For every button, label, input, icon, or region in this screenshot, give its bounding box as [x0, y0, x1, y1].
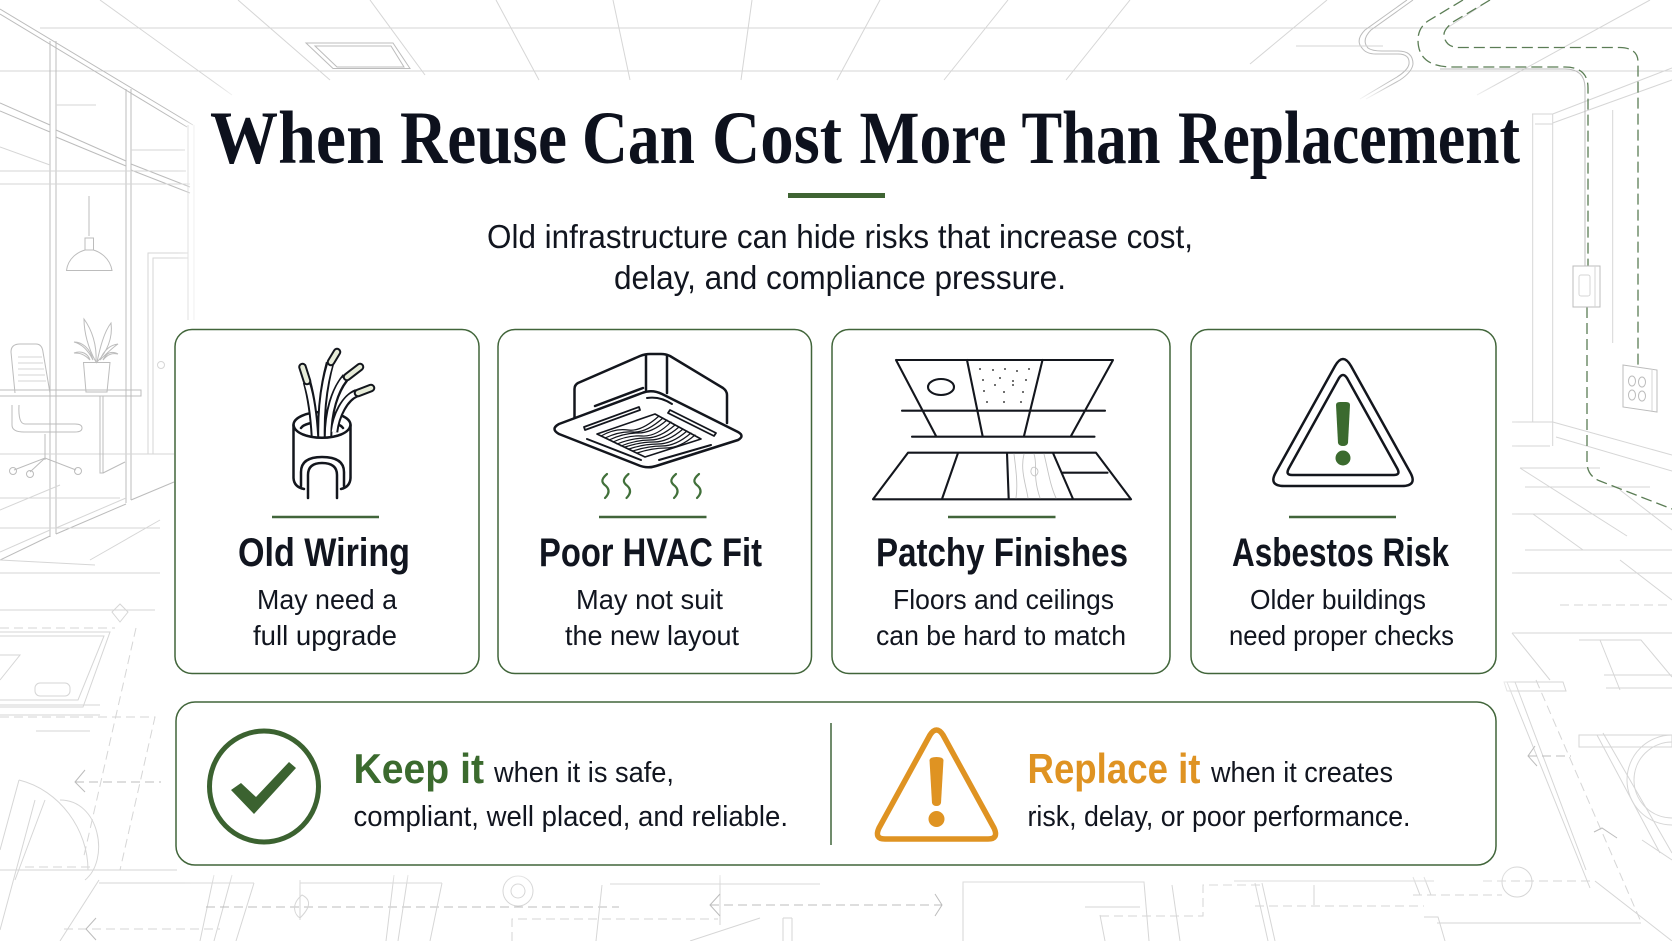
vertical divider: [830, 723, 832, 845]
ceiling grid: [0, 0, 1672, 95]
panel: old wiring: [175, 330, 479, 674]
plant: [74, 319, 118, 392]
icon: cassette air conditioner: [554, 354, 742, 498]
pendant lamp: [66, 196, 112, 270]
keep it text: Keep it: [354, 745, 484, 792]
title: Can: [582, 97, 695, 180]
description: the new layout: [565, 620, 739, 651]
description: [565, 584, 739, 651]
description: can be hard to match: [876, 620, 1126, 651]
replace it text: Replace it: [1028, 745, 1201, 792]
panel: patchy finishes: [832, 330, 1170, 674]
white centre fade: [192, 92, 1504, 874]
glass office wall: [0, 9, 194, 560]
chair: [10, 344, 82, 478]
heading: Asbestos Risk: [1232, 531, 1450, 575]
divider: [948, 516, 1056, 518]
conduit runs: [1296, 0, 1672, 509]
panel: keep or replace summary: [176, 702, 1496, 865]
keep it text: compliant, well placed, and reliable.: [354, 801, 788, 833]
floor plan left: [0, 560, 942, 941]
title: Reuse: [400, 97, 567, 180]
subtitle: delay, and compliance pressure.: [614, 259, 1066, 296]
wall switch: [1573, 266, 1600, 307]
title rule: [788, 193, 885, 198]
replace it text: when it creates: [1210, 757, 1393, 789]
description: [1229, 584, 1454, 651]
title: Replacement: [1178, 97, 1520, 180]
heading: Patchy Finishes: [876, 531, 1128, 575]
heading: Poor HVAC Fit: [539, 531, 762, 575]
right wall and floor: [1512, 68, 1672, 550]
panel: asbestos risk: [1191, 330, 1496, 674]
keep it text: when it is safe,: [493, 757, 674, 789]
title: Than: [1022, 97, 1160, 180]
subtitle: [487, 218, 1193, 296]
description: Floors and ceilings: [893, 584, 1114, 615]
wall outlet: [1623, 365, 1657, 412]
subtitle: Old infrastructure can hide risks that increase cost,: [487, 218, 1193, 255]
description: Older buildings: [1250, 584, 1426, 615]
replace it text: [1028, 745, 1410, 833]
door: [148, 253, 188, 454]
icon: check circle: [210, 731, 318, 842]
description: [253, 584, 398, 651]
keep it text: [354, 745, 788, 833]
divider: [272, 516, 379, 518]
icon: orange warning triangle: [877, 730, 996, 839]
icon: wires in conduit: [294, 352, 371, 499]
heading: Old Wiring: [238, 531, 410, 575]
replace it text: risk, delay, or poor performance.: [1028, 801, 1410, 833]
title: [210, 97, 1520, 180]
icon: mismatched ceiling and floor: [873, 360, 1131, 499]
description: May not suit: [576, 584, 723, 615]
title: When: [210, 97, 384, 180]
divider: [599, 516, 706, 518]
title: Cost: [712, 97, 842, 180]
icon: warning triangle: [1273, 359, 1413, 486]
description: need proper checks: [1229, 620, 1454, 651]
panel: poor HVAC fit: [498, 330, 812, 674]
title: More: [860, 97, 1006, 180]
description: May need a: [257, 584, 398, 615]
desk: [0, 390, 141, 473]
description: [876, 584, 1126, 651]
description: full upgrade: [253, 620, 397, 651]
floor plan right: [963, 560, 1672, 941]
divider: [1289, 516, 1396, 518]
